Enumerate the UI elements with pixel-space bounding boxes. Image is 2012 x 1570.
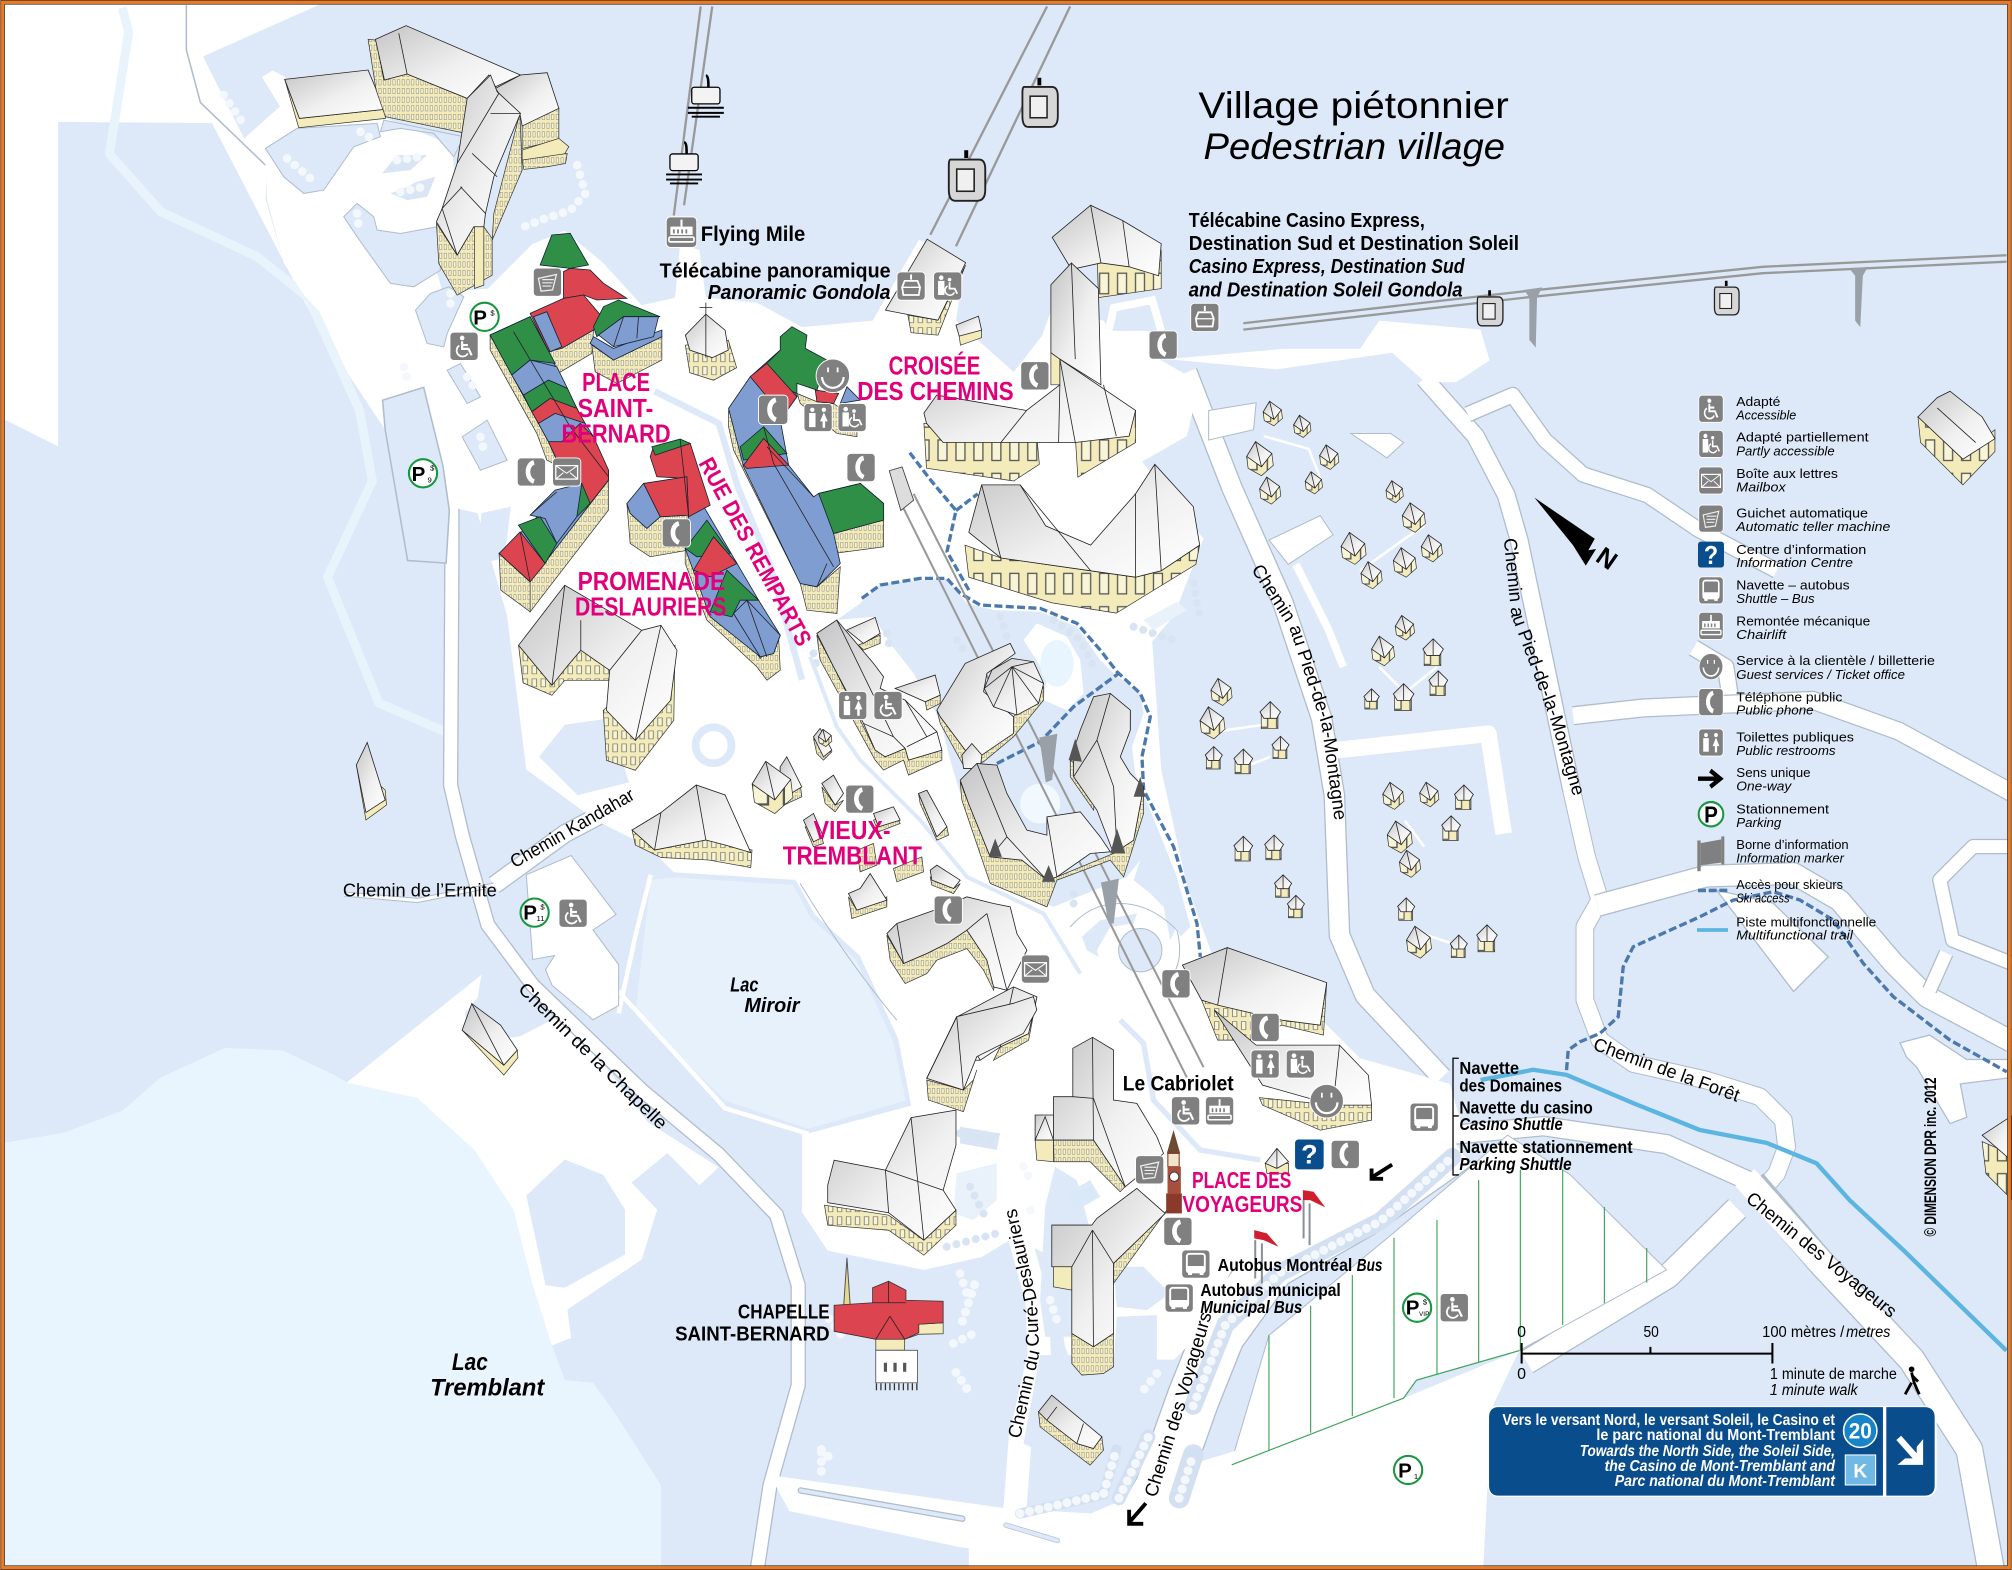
building: gondola terminal [885,239,982,345]
label: Lac Tremblant: Lac [452,1349,488,1376]
icon: parking VIP: VIP [1419,1311,1429,1318]
label: Télécabine Casino Express: and Destination Soleil Gondola [1189,278,1463,301]
hotel garden [224,95,586,470]
building: lakeside house [462,1004,518,1075]
icon: parking P1 [1394,1456,1422,1484]
village white ground [263,118,1463,1411]
scale bar: 1 minute walk [1770,1381,1859,1399]
label: Le Cabriolet: Le Cabriolet [1123,1072,1234,1095]
route K badge [1845,1455,1876,1485]
legend: restrooms [1699,729,1854,758]
building: north-east residence [965,464,1200,613]
road label: Chemin de l'Ermite: Chemin de l’Ermite [343,880,497,901]
label: Vieux-Tremblant: TREMBLANT [783,843,922,871]
icon: partly accessible gondola [934,272,962,300]
icon: phone centre [662,519,690,547]
icon: guest service south [1310,1084,1343,1118]
icon: parking VIP: P [1406,1297,1419,1320]
icon: parking west: P [473,307,487,330]
icon: municipal bus [1165,1284,1193,1312]
label: Place Saint-Bernard: SAINT- [578,395,653,423]
legend: accessible [1699,394,1796,423]
road: chalet access band [1334,734,1504,834]
building: Rue des Remparts east [729,327,884,614]
legend: chairlift: Remontée mécanique [1736,614,1870,629]
icon: Montreal bus [1182,1250,1210,1278]
chalets Vieux-Tremblant [752,729,832,814]
road: eastern curve [1573,700,2012,793]
icon: phone Voyageurs [1331,1140,1359,1169]
icon: phone east [847,453,875,482]
title [1198,84,1509,167]
legend: partly accessible: Adapté partiellement [1736,430,1869,445]
label: Place des Voyageurs: PLACE DES [1192,1167,1291,1193]
legend: one-way: One-way [1736,779,1792,794]
road: north-east loop [1468,395,1777,571]
icon: parking P1: 1 [1414,1472,1418,1481]
label: Place des Voyageurs: VOYAGEURS [1182,1191,1302,1217]
legend: mailbox: Mailbox [1736,480,1787,495]
direction banner [1488,1406,1937,1497]
chalet footpaths [1219,436,1450,943]
legend: one-way: Sens unique [1736,766,1811,780]
icon: parking P11: 11 [537,914,545,923]
label: Croisée des Chemins: CROISÉE [889,352,980,381]
label: Vieux-Tremblant [783,817,922,871]
stream [109,8,449,734]
label: Promenade Deslauriers: DESLAURIERS [575,594,726,622]
building: panoramic station [685,303,737,380]
legend: ski access: Ski access [1736,891,1790,905]
white land top-left [4,4,385,446]
building: west house [356,742,386,820]
road: south-east parking patch [1900,1035,2012,1124]
legend: mailbox: Boîte aux lettres [1736,466,1838,481]
road: Chemin des Voyageurs south [1129,1144,1456,1546]
icon: Cabriolet lift [1205,1097,1234,1125]
legend: restrooms: Toilettes publiques [1736,730,1854,745]
road label: Chemin au Pied-de-la-Montagne inner: Chemin au Pied-de-la-Montagne [1254,566,1344,820]
road: Chemin du Curé-Deslauriers [1003,1059,1053,1526]
label: Télécabine Casino Express [1189,209,1519,301]
legend: ATM [1699,505,1890,534]
legend: parking: Parking [1736,815,1781,830]
icon: parking P9: P [412,463,425,486]
icon: wheelchair P11 [559,899,587,927]
legend: accessible: Adapté [1736,394,1780,409]
road label: Chemin de la Forêt: Chemin de la Forêt [1591,1033,1743,1106]
label: Flying Mile: Flying Mile [701,223,805,246]
building: Saint-Bernard colored roofs [490,233,662,612]
legend: information marker [1697,836,1849,871]
paths around Lac Miroir [603,875,808,1134]
icon: information centre [1295,1139,1324,1170]
snow tree strips [821,1157,1452,1514]
white around gondola terminal [1168,321,1490,382]
label: shuttles [1459,1058,1633,1174]
multifunctional trail [1481,1070,2006,1351]
road: link to parking [1527,1208,1737,1362]
legend: guest services [1699,654,1935,682]
icon: phone west [517,458,546,486]
legend: ski access: Accès pour skieurs [1736,877,1843,892]
icon: ATM Voyageurs [1136,1156,1164,1184]
label: shuttles: Casino Shuttle [1459,1114,1563,1134]
label: Lac Tremblant: Tremblant [430,1375,545,1402]
road: lower eastern link [1597,874,2012,1042]
label: buses: Autobus municipal [1200,1280,1341,1300]
legend: ski access [1698,877,1843,905]
north arrow: N [1591,542,1622,576]
road label: Chemin de la Chapelle: Chemin de la Chapelle [514,978,672,1133]
icon: wheelchair [450,332,478,360]
ski access trails [862,453,2007,1072]
legend: restrooms: Public restrooms [1736,743,1836,758]
legend: parking: P [1704,802,1718,828]
building: upper-south block [927,997,1037,1112]
road label: Chemin Kandahar: Chemin Kandahar [506,784,638,872]
legend: information centre: ? [1704,542,1718,570]
legend: guest services: Service à la clientèle / billetterie [1736,654,1935,668]
building: south chalet [1038,1395,1103,1465]
icon: restrooms Remparts [804,403,832,432]
label: Télécabine panoramique [660,260,891,304]
building: small chapel Place des Voyageurs [1265,1148,1289,1173]
legend: ATM: Guichet automatique [1736,506,1868,521]
cable pylons [1039,267,1868,924]
service icons [409,217,1468,1484]
legend: public phone: Public phone [1736,703,1814,718]
icon: phone Croisée [1021,362,1049,390]
scale bar: metres [1846,1323,1890,1341]
icon: parking VIP [1403,1294,1431,1322]
legend [1697,394,1935,943]
icon: phone Vieux-Tremblant [846,785,874,813]
road: west road upper line [186,5,456,490]
legend: shuttle bus: Shuttle – Bus [1736,591,1815,606]
icon: phone lower Voyageurs [1164,1217,1192,1245]
icon: guest service [816,359,850,393]
legend: information marker: Borne d’information [1736,837,1849,852]
icon: mail west [553,458,581,486]
chalets centre [1200,678,1304,918]
cable lines [674,6,2006,1077]
label: Croisée des Chemins: DES CHEMINS [857,378,1014,406]
white parking patches [526,403,1667,1465]
icon: parking P11 [521,899,549,927]
flags [1254,1190,1325,1283]
building: east edge [1982,1116,2012,1199]
building: south of Lac Miroir [825,1110,956,1255]
pale blue garden patches [478,391,1057,1570]
scale bar: 50 [1643,1323,1659,1341]
chapel Saint-Bernard [834,1258,943,1387]
scale bar [1517,1323,1919,1399]
legend: chairlift [1699,612,1870,642]
chairlift chairs [666,76,724,183]
icon: phone Cabriolet east [1251,1013,1279,1042]
icon: parking west: $ [490,309,495,318]
icon: Flying Mile lift [666,217,697,247]
icon: panoramic gondola [897,272,925,300]
title: Pedestrian village [1204,125,1505,167]
icon: partly Remparts [838,403,866,432]
legend: accessible: Accessible [1735,408,1796,423]
legend: parking: Stationnement [1736,802,1830,817]
icon: phone lower village [934,896,962,924]
icon: parking P1: P [1398,1460,1412,1483]
legend: shuttle bus [1699,577,1850,606]
P1 parking white ground [1121,1351,1519,1570]
icon: parking P11: P [523,902,537,925]
icon: parking VIP: $ [1423,1297,1428,1306]
road: Chemin au Pied-de-la-Montagne outer and Forêt [1572,790,1787,1200]
label: shuttles: Parking Shuttle [1459,1154,1572,1174]
road: Chemin de la Chapelle [451,507,798,1570]
label: Lac Miroir: Lac [730,974,759,997]
one-way arrows [1129,1165,1392,1524]
beach at Lac Tremblant [347,975,719,1346]
icon: restrooms centre [839,691,867,720]
route 20 badge [1844,1414,1877,1447]
label: Télécabine Casino Express: Casino Express, Destination Sud [1189,255,1465,278]
icon: phone castle [1149,331,1177,359]
parking markers [409,303,1431,1484]
label: Télécabine Casino Express: Télécabine Casino Express, [1189,209,1425,232]
icon: phone Remparts [758,395,788,425]
parking outline P9 [383,387,449,563]
road: bottom band [770,1475,1136,1570]
label: buses: Municipal Bus [1200,1297,1303,1317]
white ring under casino gondola [1109,300,1161,331]
road: Chemin Kandahar [494,776,674,885]
direction arrow [1897,1438,1923,1465]
building: Cabriolet east complex [1182,948,1372,1130]
label: Promenade Deslauriers [575,568,726,622]
label: Chapelle Saint-Bernard: CHAPELLE [738,1301,830,1324]
buildings: Vieux-Tremblant small [780,728,960,919]
road label: Chemin des Voyageurs east: Chemin des Voyageurs [1742,1187,1901,1322]
lower village ground [947,1020,1260,1474]
icon: partly Cabriolet [1286,1050,1314,1078]
legend: public phone [1699,689,1842,718]
road label: Chemin du Curé-Deslauriers: Chemin du Curé-Deslauriers [1007,1209,1040,1437]
label: shuttles: des Domaines [1459,1076,1562,1096]
icon: Casino gondola [1191,303,1219,332]
icon: parking P9 [409,459,437,487]
label: shuttles: Navette [1459,1058,1519,1078]
direction banner: le parc national du Mont-Tremblant [1596,1427,1835,1444]
building: octagon [937,643,1044,768]
road: Chemin au Pied-de-la-Montagne inner [1187,372,1442,1077]
building: U-shape [960,693,1145,907]
icon: parking P11: $ [540,902,545,911]
icon: wheelchair centre [874,691,902,720]
label: Lac Tremblant [430,1349,545,1402]
route K badge: K [1853,1462,1867,1483]
Lac Miroir [635,877,906,1129]
route 20 badge: 20 [1849,1419,1872,1444]
direction banner: Towards the North Side, the Soleil Side, [1580,1443,1835,1460]
label: buses: Autobus Montréal [1218,1255,1352,1275]
label: Lac Miroir [730,974,800,1017]
gondola cabins [949,78,1739,326]
icon: mail lower [1021,955,1050,983]
building: east house [1918,391,1995,485]
legend: ATM: Automatic teller machine [1735,519,1890,534]
icon: walker [1905,1366,1919,1394]
legend: multifunctional trail: Multifunctional trail [1736,928,1854,943]
shuttle bracket [1453,1058,1459,1175]
legend: information marker: Information marker [1736,851,1845,866]
scale bar: 0 [1517,1365,1526,1383]
legend: mailbox [1699,466,1838,495]
building: upper hotel [285,26,569,295]
building: Rue des Remparts west [627,439,780,680]
road label: Chemin des Voyageurs south: Chemin des Voyageurs [1146,1312,1211,1496]
north arrow [1534,498,1622,576]
label: Promenade Deslauriers: PROMENADE [578,568,725,596]
icon: shuttle [1410,1103,1438,1131]
label: Place Saint-Bernard: BERNARD [562,421,671,449]
legend: public phone: Téléphone public [1736,690,1842,705]
label: shuttles: Navette du casino [1459,1097,1593,1117]
label: buses: Bus [1357,1255,1383,1275]
road: Chemin de l'Ermite [344,885,494,900]
legend: information centre: Information Centre [1736,556,1853,570]
label: Place Saint-Bernard: PLACE [582,369,650,397]
building: village centre north-west [817,617,942,775]
chalets north-east [1247,401,1448,711]
legend: multifunctional trail [1697,915,1876,943]
copyright: © DIMENSION DPR inc. 2012 [1921,1077,1940,1237]
building: Place des Voyageurs long block [1035,1037,1167,1375]
legend: chairlift: Chairlift [1736,627,1787,642]
direction banner: the Casino de Mont-Tremblant and [1605,1458,1836,1475]
parking hatch lines [1232,1170,1647,1465]
label: Vieux-Tremblant: VIEUX- [814,817,891,845]
icon: information centre: ? [1301,1139,1318,1169]
legend: one-way [1698,766,1811,794]
building: Croisée des Chemins [924,205,1161,481]
legend: shuttle bus: Navette – autobus [1736,578,1850,593]
legend: information centre: Centre d’information [1736,542,1866,557]
road: chalet access strip [1296,564,1343,667]
label: Télécabine panoramique: Télécabine panoramique [660,260,891,283]
building: lower village [887,897,1037,1060]
icon: wheelchair VIP [1440,1294,1468,1322]
legend: information centre [1698,542,1866,570]
building: south-west of Vieux-Tremblant [632,785,752,868]
icon: ATM St-Bernard [533,268,562,296]
chalets south [1383,782,1497,958]
road: stub near legend [1694,648,1732,708]
village centre ground [800,578,1200,1020]
icon: parking P9: 9 [428,475,432,484]
direction banner: Vers le versant Nord, le versant Soleil, le Casino et [1502,1412,1835,1429]
label: Chapelle Saint-Bernard: SAINT-BERNARD [675,1322,830,1345]
clock tower [1166,1130,1182,1213]
icon: phone Cabriolet [1162,970,1190,998]
icon: parking P9: $ [430,464,435,473]
road label: Chemin au Pied-de-la-Montagne outer: Chemin au Pied-de-la-Montagne [1504,539,1582,795]
road: far east loop [1930,847,2012,990]
icon: parking west [470,303,499,331]
road: Chemin des Voyageurs east [1450,1126,1991,1570]
label: shuttles: Navette stationnement [1459,1137,1633,1157]
scale bar: 100 mètres / [1762,1323,1845,1341]
legend: multifunctional trail: Piste multifonctionnelle [1736,915,1876,929]
legend: partly accessible [1699,430,1869,459]
road: parking east [1717,890,1828,992]
scale bar: 1 minute de marche [1770,1365,1897,1383]
legend: guest services: Guest services / Ticket office [1736,667,1905,682]
scale bar: 0 [1517,1323,1526,1341]
icon: wheelchair Cabriolet [1171,1097,1200,1125]
label: Croisée des Chemins [857,352,1014,406]
direction banner: Parc national du Mont-Tremblant [1615,1473,1836,1490]
icon: restrooms Cabriolet [1251,1050,1279,1078]
label: Place Saint-Bernard [562,369,671,449]
building: Promenade Deslauriers [519,585,677,770]
title: Village piétonnier [1198,84,1509,126]
label: Place des Voyageurs [1182,1167,1302,1217]
Cabriolet bottom station [889,467,914,511]
label: buses [1200,1255,1383,1317]
legend: parking [1699,802,1830,830]
road: Pied-de-la-Montagne upper section [1424,378,1572,790]
Lac Tremblant water [4,1048,661,1570]
legend: partly accessible: Partly accessible [1736,444,1835,459]
label: Télécabine Casino Express: Destination Sud et Destination Soleil [1189,232,1519,255]
label: Chapelle Saint-Bernard [675,1301,830,1345]
label: Télécabine panoramique: Panoramic Gondola [708,281,891,304]
label: Lac Miroir: Miroir [744,994,800,1017]
label: Rue des Remparts: RUE DES REMPARTS [694,453,817,650]
